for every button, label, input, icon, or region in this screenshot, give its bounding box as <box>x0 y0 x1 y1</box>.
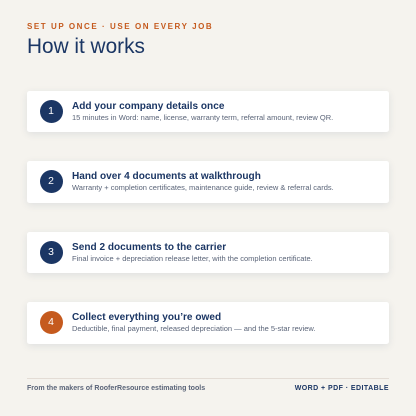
step 2 card <box>27 161 389 203</box>
step 2 description: Warranty + completion certificates, maintenance guide, review & referral cards. <box>72 183 334 192</box>
step 4 heading: Collect everything you’re owed <box>72 312 221 323</box>
step 3 number <box>40 241 62 264</box>
step 2 number <box>40 170 62 193</box>
step 3 heading: Send 2 documents to the carrier <box>72 242 226 253</box>
step 4 number <box>40 311 62 334</box>
step 1 description: 15 minutes in Word: name, license, warranty term, referral amount, review QR. <box>72 113 333 122</box>
step 1 number: 1 <box>48 106 54 117</box>
step 1 heading: Add your company details once <box>72 101 224 112</box>
footer left text: From the makers of RooferResource estimating tools <box>27 385 205 392</box>
title: How it works <box>27 35 145 58</box>
step 2 number: 2 <box>48 176 54 187</box>
step 3 number: 3 <box>48 247 54 258</box>
step 4 number: 4 <box>48 317 54 328</box>
step 1 card <box>27 91 389 132</box>
step 2 heading: Hand over 4 documents at walkthrough <box>72 171 261 182</box>
step 1 number <box>40 100 62 123</box>
step 3 description: Final invoice + depreciation release letter, with the completion certificate. <box>72 254 313 263</box>
eyebrow: SET UP ONCE · USE ON EVERY JOB <box>27 22 213 31</box>
footer right text: WORD + PDF · EDITABLE <box>295 385 389 392</box>
step 4 card <box>27 302 389 344</box>
step 3 card <box>27 232 389 273</box>
step 4 description: Deductible, final payment, released depreciation — and the 5-star review. <box>72 324 315 333</box>
